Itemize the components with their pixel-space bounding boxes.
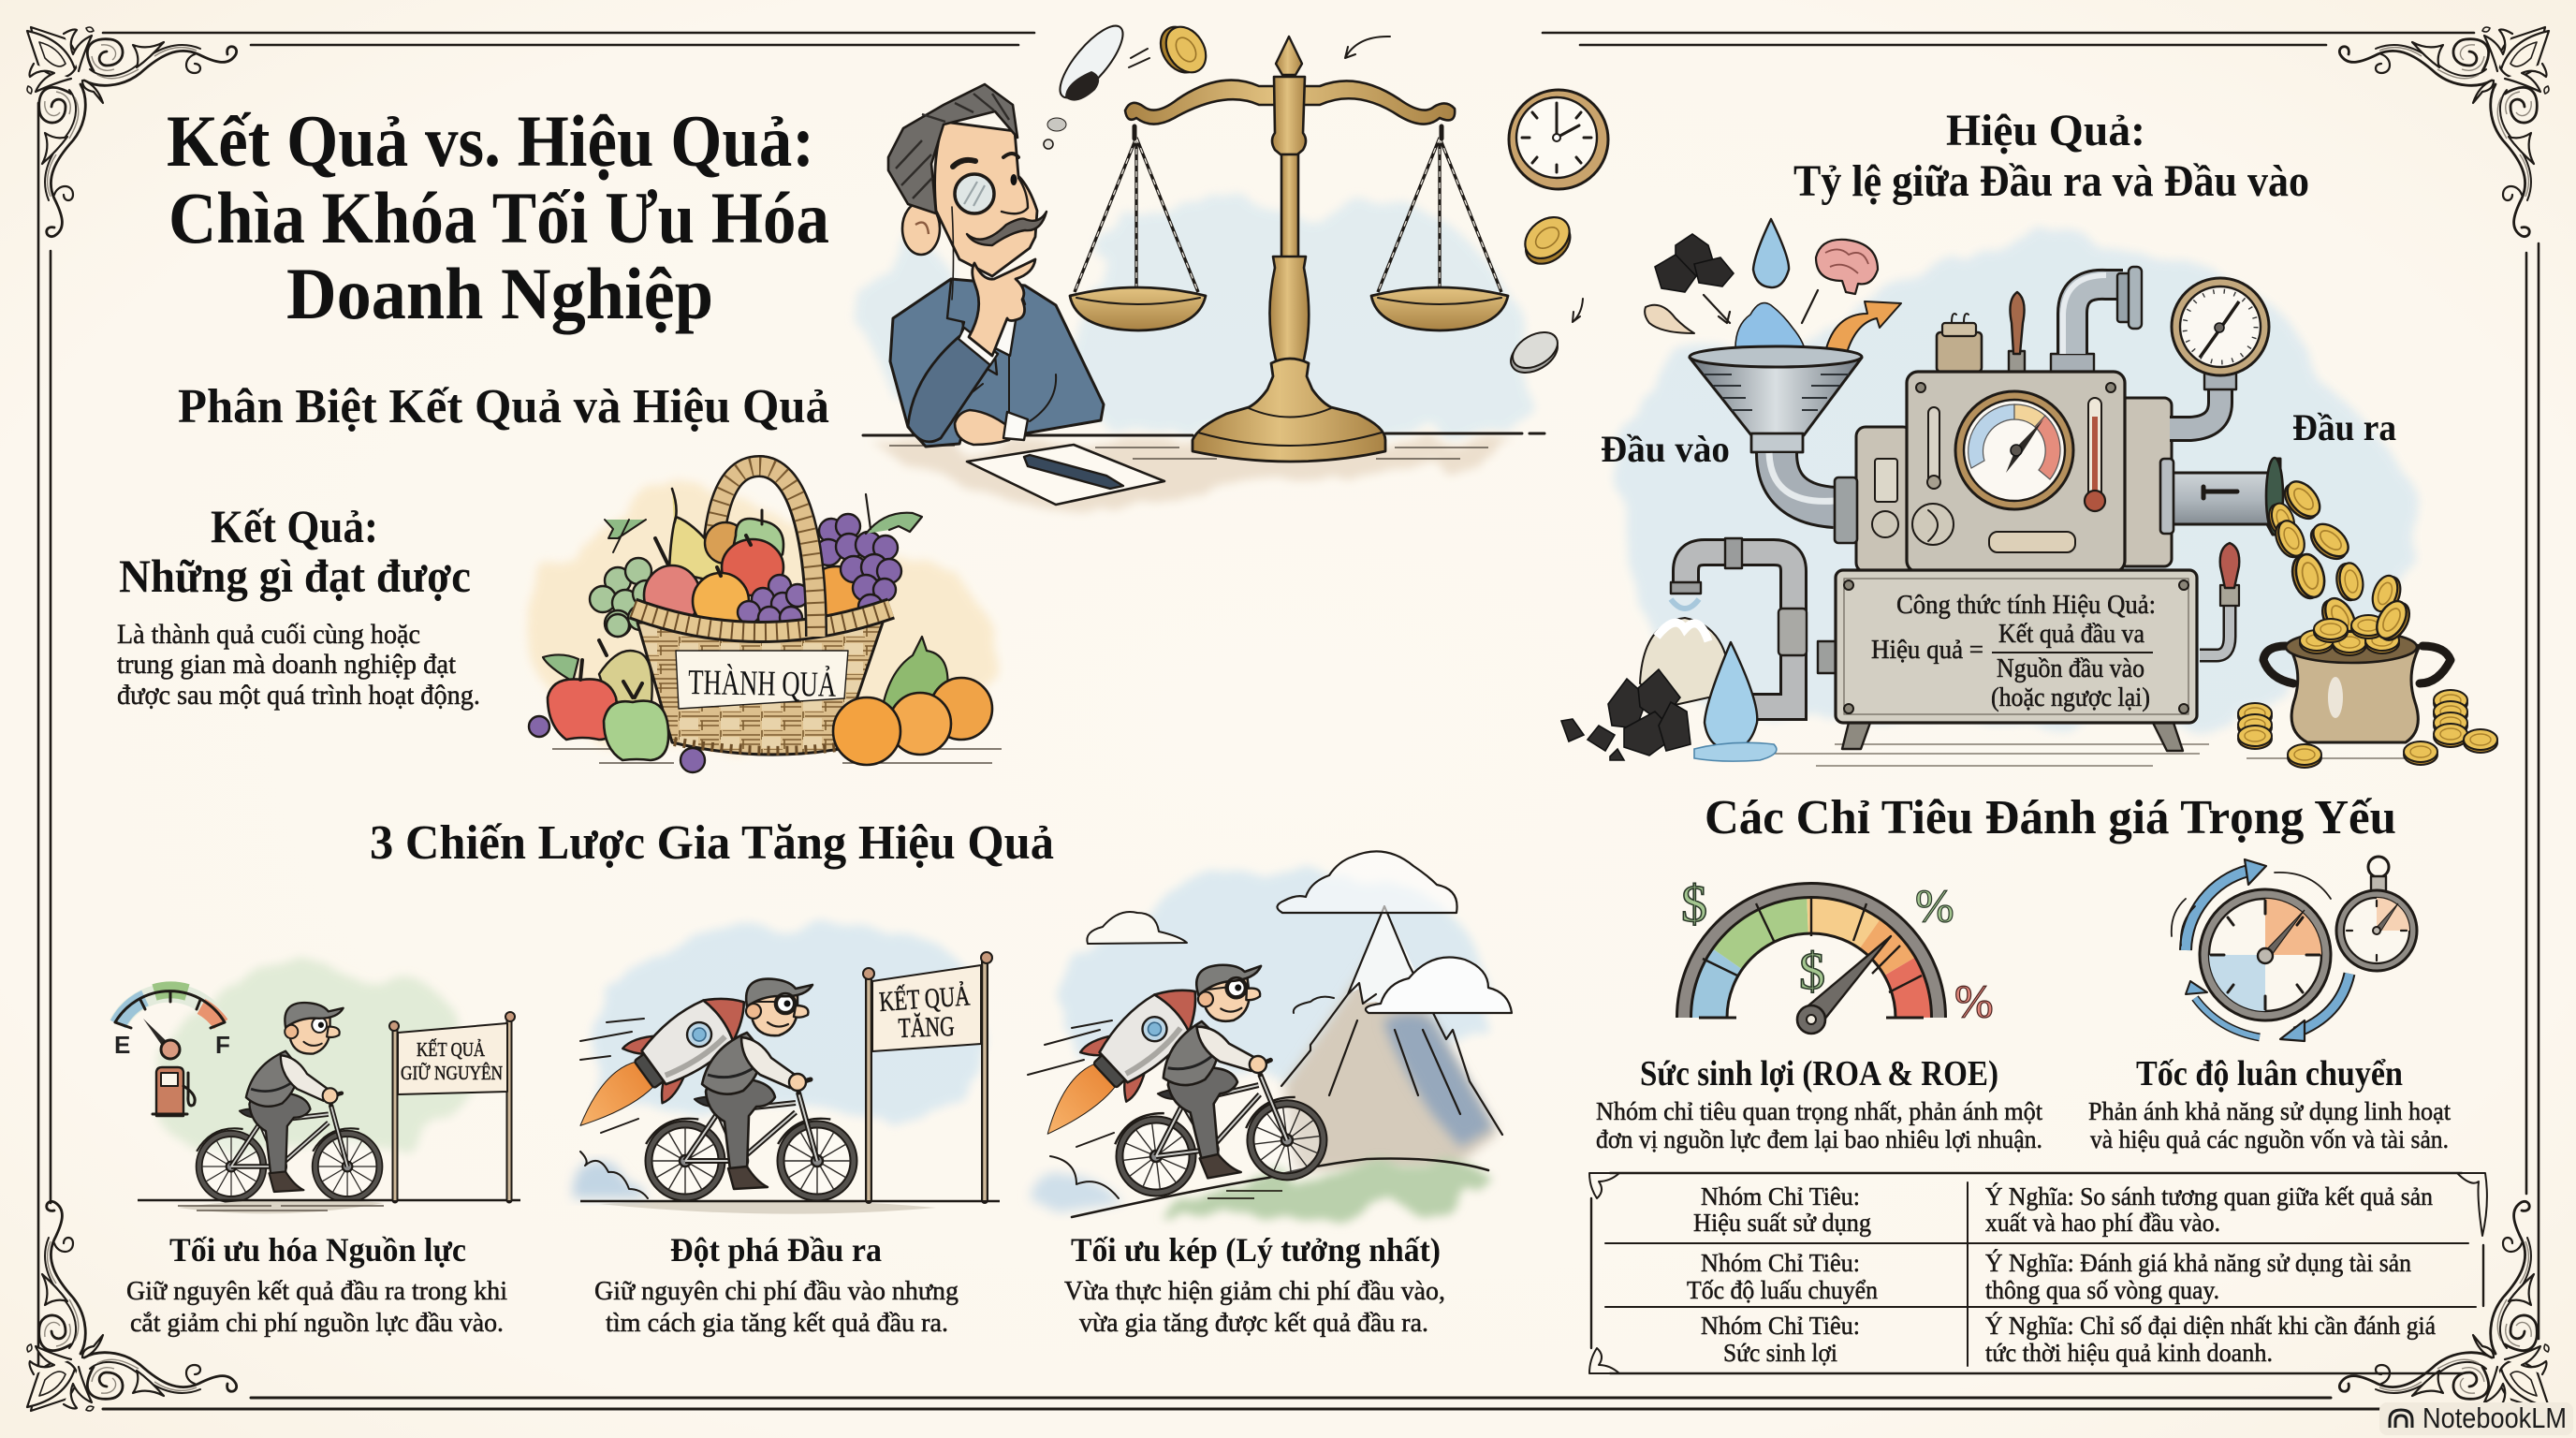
paper and pen [967, 445, 1164, 505]
machine gauge [1955, 391, 2073, 509]
illustration: efficiency machine [1561, 219, 2497, 768]
turnover text [2088, 1097, 2451, 1153]
row 2: Tốc độ luấu chuyển [1687, 1276, 1878, 1304]
smoke and speed lines [573, 1019, 648, 1198]
row 1: xuất và hao phí đầu vào. [1985, 1209, 2220, 1237]
panel: strategy 1 [114, 961, 520, 1338]
thought bubble [1044, 17, 1133, 149]
sign: kết quả giữ nguyên: KẾT QUẢ [417, 1038, 486, 1061]
businessman [888, 84, 1104, 447]
clouds [1087, 851, 1512, 1013]
label: thành quả [676, 651, 848, 709]
sign: kết quả giữ nguyên: GIỮ NGUYÊN [401, 1062, 503, 1084]
ground line [138, 1199, 520, 1213]
lower pipe and inputs [1561, 538, 1807, 761]
panel: strategy 2 [558, 922, 1000, 1338]
row 2: thông qua số vòng quay. [1985, 1276, 2219, 1304]
strategy 3 text [1064, 1277, 1445, 1338]
turnover text: Phản ánh khả năng sử dụng linh hoạt [2088, 1097, 2451, 1125]
heading: hiệu quả: Tỷ lệ giữa Đầu ra và Đầu vào [1793, 156, 2309, 206]
panel: strategy 3 [1007, 851, 1512, 1338]
row 3: tức thời hiệu quả kinh doanh. [1985, 1339, 2273, 1367]
heading: Kết Quả: [211, 500, 378, 552]
machine body [1835, 267, 2172, 572]
strategy 3 title: Tối ưu kép (Lý tưởng nhất) [1071, 1231, 1441, 1269]
formula plate: Công thức tính Hiệu Quả: [1896, 591, 2156, 620]
profit gauge: % [1915, 879, 1954, 932]
body text [117, 619, 480, 711]
row 1: Hiệu suất sử dụng [1693, 1209, 1871, 1237]
rider without rocket [197, 1003, 379, 1199]
mountain [1281, 906, 1502, 1170]
ROA text: Nhóm chỉ tiêu quan trọng nhất, phản ánh một [1596, 1097, 2042, 1125]
falling coins [1129, 17, 1583, 380]
heading [119, 500, 471, 602]
formula plate [1818, 543, 2239, 751]
turnover text: và hiệu quả các nguồn vốn và tài sản. [2090, 1125, 2449, 1153]
title: Chìa Khóa Tối Ưu Hóa [168, 177, 829, 258]
heading: 3 chiến lược: 3 Chiến Lược Gia Tăng Hiệu Quả [370, 816, 1054, 870]
strategy 1 text: Giữ nguyên kết quả đầu ra trong khi [126, 1277, 507, 1306]
sign: kết quả giữ nguyên [389, 1012, 515, 1200]
row 1 [1693, 1182, 2433, 1237]
strategy 1 title: Tối ưu hóa Nguồn lực [169, 1231, 466, 1269]
strategy 2 text: Giữ nguyên chi phí đầu vào nhưng [594, 1277, 959, 1306]
fuel gauge: F [215, 1031, 230, 1059]
body text: Là thành quả cuối cùng hoặc [117, 619, 420, 650]
fuel gauge [114, 990, 230, 1059]
table frame [1589, 1173, 2487, 1373]
pressure gauge [2170, 278, 2269, 429]
balance scale [1070, 37, 1508, 462]
illustration: businessman and balance scale [863, 17, 1608, 512]
inputs [1645, 219, 1901, 360]
profit gauge: $ [1681, 875, 1707, 933]
rocket rider [558, 975, 854, 1197]
strategy 3 text: Vừa thực hiện giảm chi phí đầu vào, [1064, 1277, 1445, 1306]
profit gauge: $ [1799, 943, 1825, 1001]
ROA text [1596, 1097, 2042, 1153]
heading: hiệu quả [1793, 106, 2309, 206]
formula plate: (hoặc ngược lại) [1991, 683, 2150, 712]
heading: Những gì đạt được [119, 550, 471, 602]
sign: kết quả tăng [863, 952, 992, 1200]
clock [1509, 90, 1608, 189]
strategy 2 text [594, 1277, 959, 1338]
profit gauge: % [1954, 975, 1994, 1027]
fruit inside [590, 489, 922, 637]
row 3 [1701, 1312, 2436, 1367]
title [167, 100, 829, 334]
row 3: Ý Nghĩa: Chỉ số đại diện nhất khi cần đánh giá [1985, 1312, 2436, 1340]
funnel [1690, 346, 1862, 507]
output pipe [2160, 458, 2283, 535]
profit gauge [1681, 875, 1994, 1034]
panel: kết quả [117, 500, 480, 711]
output coins [2265, 476, 2405, 642]
heading: các chỉ tiêu: Các Chỉ Tiêu Đánh giá Trọng Yếu [1705, 791, 2396, 844]
illustration: fruit basket [529, 466, 1003, 772]
stopwatch icons [2172, 857, 2417, 1041]
row 3: Nhóm Chỉ Tiêu: [1701, 1312, 1860, 1340]
row 2: Ý Nghĩa: Đánh giá khả năng sử dụng tài sản [1985, 1249, 2411, 1277]
row 1: Ý Nghĩa: So sánh tương quan giữa kết quả sản [1985, 1182, 2433, 1211]
strategy 1 text: cắt giảm chi phí nguồn lực đầu vào. [130, 1309, 504, 1338]
basket body [637, 623, 883, 755]
panel: ROA and ROE [1596, 875, 2042, 1153]
row 2 [1687, 1249, 2411, 1304]
panel: tốc độ luân chuyển [2088, 857, 2451, 1153]
label: đầu ra: Đầu ra [2292, 406, 2396, 448]
coin pot [2238, 596, 2497, 768]
title: Doanh Nghiệp [286, 253, 713, 334]
front fruits [529, 637, 992, 772]
heading: phân biệt: Phân Biệt Kết Quả và Hiệu Quả [178, 380, 829, 433]
title: Kết Quả vs. Hiệu Quả: [167, 100, 814, 182]
ROA text: đơn vị nguồn lực đem lại bao nhiêu lợi nhuận. [1596, 1125, 2042, 1153]
sign: kết quả tăng: TĂNG [898, 1011, 955, 1044]
formula plate: Hiệu quả = [1871, 636, 1983, 665]
row 1: Nhóm Chỉ Tiêu: [1701, 1182, 1860, 1211]
fuel pump [153, 1067, 195, 1116]
row 3: Sức sinh lợi [1723, 1339, 1837, 1367]
hill [1030, 1159, 1489, 1226]
formula plate: Kết quả đầu va [1998, 620, 2145, 649]
strategy 2 title: Đột phá Đầu ra [670, 1231, 882, 1269]
handle [711, 466, 816, 646]
label: đầu vào: Đầu vào [1601, 428, 1730, 470]
strategy 1 text [126, 1277, 507, 1338]
formula plate: Nguồn đầu vào [1997, 654, 2144, 683]
body text: trung gian mà doanh nghiệp đạt [117, 649, 457, 680]
strategy 3 text: vừa gia tăng được kết quả đầu ra. [1079, 1309, 1428, 1338]
speed lines [1028, 1020, 1119, 1198]
turnover title: Tốc độ luân chuyển [2136, 1054, 2403, 1093]
row 2: Nhóm Chỉ Tiêu: [1701, 1249, 1860, 1277]
ground [580, 1200, 1000, 1202]
table: chỉ tiêu [1589, 1173, 2487, 1373]
strategy 2 text: tìm cách gia tăng kết quả đầu ra. [606, 1309, 948, 1338]
rocket rider on slope [1007, 950, 1327, 1208]
sign: kết quả tăng: KẾT QUẢ [878, 979, 971, 1018]
heading: hiệu quả: Hiệu Quả: [1946, 106, 2145, 155]
body text: được sau một quá trình hoạt động. [117, 680, 480, 711]
label: thành quả: THÀNH QUẢ [688, 662, 837, 705]
ROA title: Sức sinh lợi (ROA & ROE) [1640, 1054, 1998, 1093]
fuel gauge: E [114, 1031, 130, 1059]
